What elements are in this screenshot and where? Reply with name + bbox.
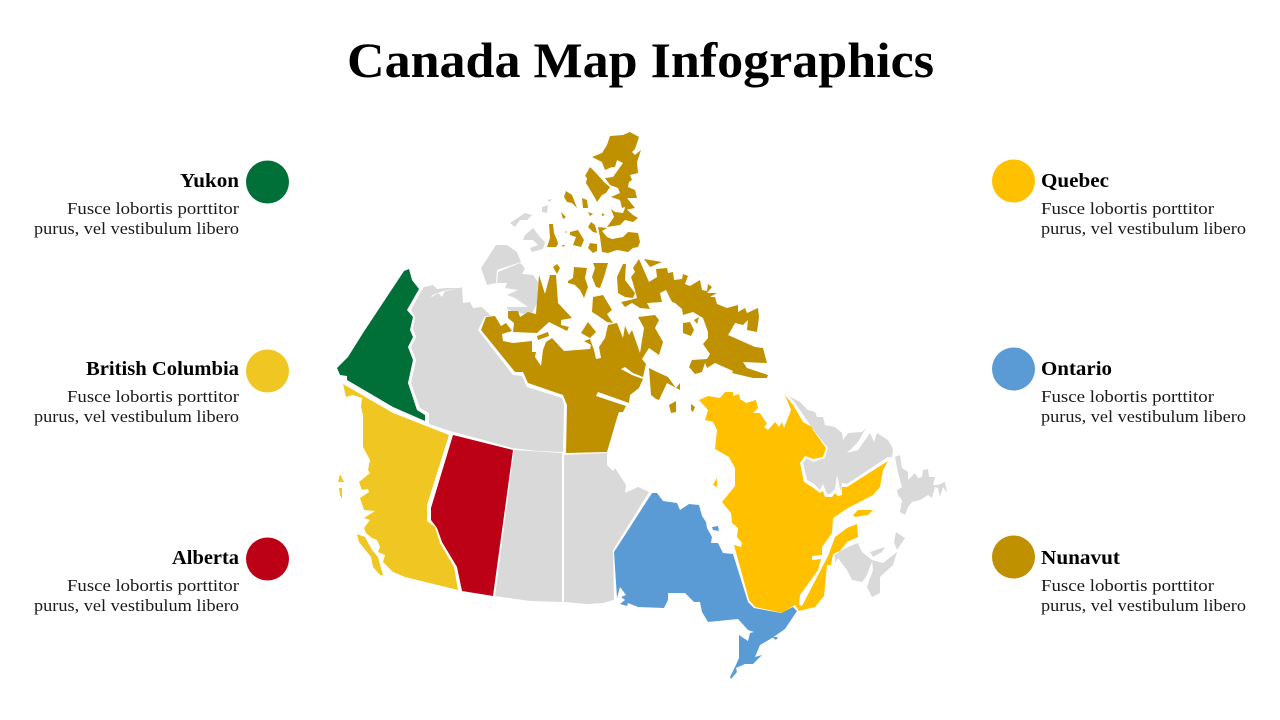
legend item: Quebec: purus, vel vestibulum libero bbox=[1041, 219, 1246, 238]
legend item: Yukon: Fusce lobortis porttitor bbox=[67, 199, 240, 218]
region: Quebec bbox=[699, 392, 888, 613]
legend item: Nunavut: purus, vel vestibulum libero bbox=[1041, 596, 1246, 615]
region: Nunavut bbox=[481, 132, 768, 453]
legend item: Quebec bbox=[992, 160, 1246, 238]
legend item: British Columbia: British Columbia bbox=[86, 358, 239, 380]
legend item: Ontario: Fusce lobortis porttitor bbox=[1041, 387, 1215, 406]
region: Manitoba bbox=[564, 453, 649, 604]
region: Yukon bbox=[337, 269, 425, 421]
legend item: British Columbia: Fusce lobortis porttitor bbox=[67, 387, 240, 406]
legend item: Quebec: Fusce lobortis porttitor bbox=[1041, 199, 1215, 218]
region: Atlantic provinces bbox=[787, 395, 947, 597]
legend item: Nunavut: Nunavut bbox=[1041, 547, 1120, 569]
legend item: Alberta: purus, vel vestibulum libero bbox=[34, 596, 239, 615]
legend item: Nunavut: Fusce lobortis porttitor bbox=[1041, 576, 1215, 595]
region: Alberta bbox=[431, 435, 513, 596]
region: Ontario bbox=[614, 493, 797, 679]
region: British Columbia bbox=[338, 384, 458, 590]
legend item: Nunavut bbox=[992, 536, 1246, 615]
legend item: Alberta bbox=[34, 538, 289, 615]
legend item: Ontario bbox=[992, 348, 1246, 426]
legend item: Alberta: Fusce lobortis porttitor bbox=[67, 576, 240, 595]
title: Canada Map Infographics bbox=[347, 32, 934, 88]
map of Canada bbox=[337, 132, 947, 679]
legend item: Ontario: Ontario bbox=[1041, 358, 1112, 380]
region: Saskatchewan bbox=[495, 450, 562, 602]
legend item: Ontario: purus, vel vestibulum libero bbox=[1041, 407, 1246, 426]
legend item: Yukon: purus, vel vestibulum libero bbox=[34, 219, 239, 238]
legend item: Alberta: Alberta bbox=[172, 547, 239, 569]
region: Northwest Territories bbox=[411, 199, 564, 452]
legend item: Yukon: Yukon bbox=[180, 170, 239, 192]
legend item: British Columbia bbox=[34, 350, 289, 426]
legend item: British Columbia: purus, vel vestibulum libero bbox=[34, 407, 239, 426]
legend item: Yukon bbox=[34, 160, 289, 238]
legend item: Quebec: Quebec bbox=[1041, 170, 1109, 192]
